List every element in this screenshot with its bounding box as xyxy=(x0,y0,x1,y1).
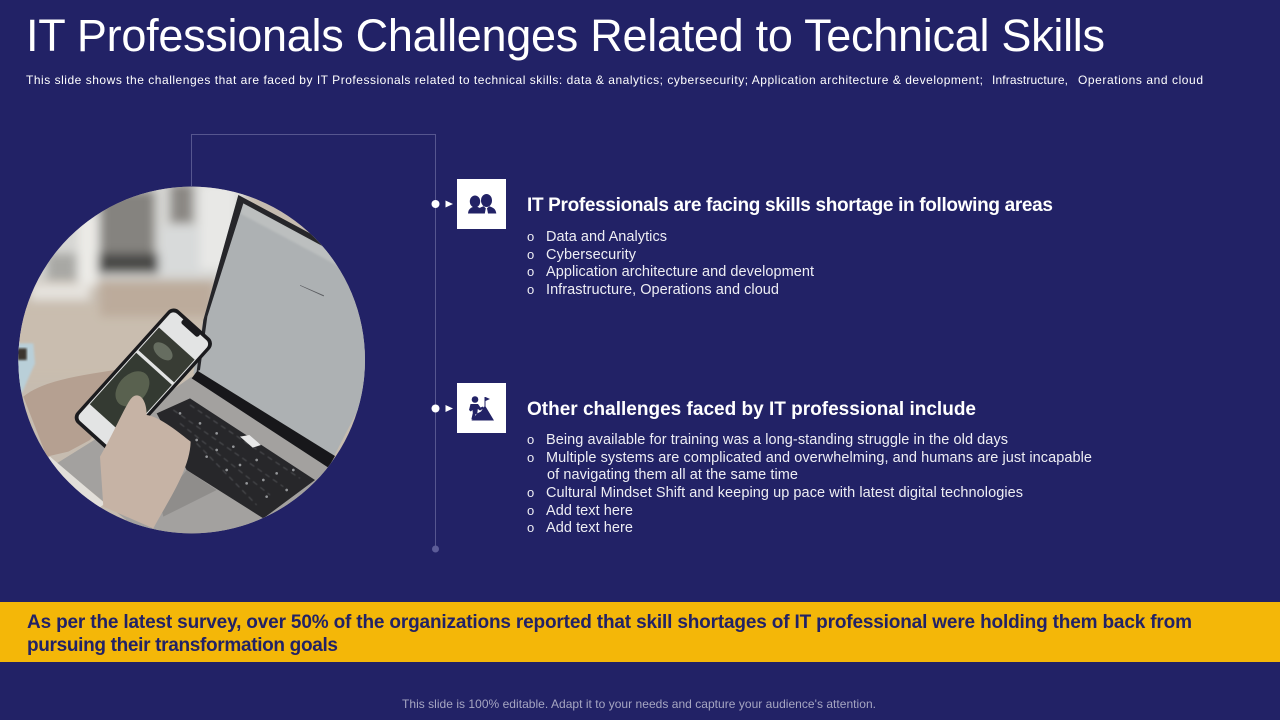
bullet list: Data and Analytics xyxy=(546,229,667,245)
callout banner: As per the latest survey, over 50% of the organizations reported that skill shortages of IT professional were holding them back from xyxy=(27,612,1192,633)
bullet list: o xyxy=(527,282,534,297)
icon: climber reaching flag on mountain xyxy=(457,383,506,433)
icon: two business people xyxy=(457,179,506,229)
bullet list: o xyxy=(527,432,534,447)
bullet list: o xyxy=(527,264,534,279)
bullet list: o xyxy=(527,520,534,535)
bullet list: Add text here xyxy=(546,503,633,519)
bullet list: Infrastructure, Operations and cloud xyxy=(546,282,779,298)
laptop base xyxy=(57,377,337,537)
left hand xyxy=(23,370,117,457)
photo: phone and laptop xyxy=(7,177,370,537)
title: IT Professionals Challenges Related to Technical Skills xyxy=(26,10,1105,61)
bullet list: o xyxy=(527,247,534,262)
bullet list: o xyxy=(527,450,534,465)
bullet list: o xyxy=(527,229,534,244)
callout banner xyxy=(0,602,1280,662)
bullet list: of navigating them all at the same time xyxy=(547,467,798,483)
bullet list: Cybersecurity xyxy=(546,247,637,263)
heading: IT Professionals are facing skills shortage in following areas xyxy=(527,195,1053,216)
bullet list xyxy=(527,229,814,298)
keyboard xyxy=(157,398,315,518)
callout banner: pursuing their transformation goals xyxy=(27,635,338,656)
timeline connector xyxy=(192,134,439,552)
phone xyxy=(74,308,212,448)
bullet list: Multiple systems are complicated and overwhelming, and humans are just incapable xyxy=(546,450,1092,466)
bullet list: Add text here xyxy=(546,520,633,536)
bullet list: Application architecture and development xyxy=(546,264,814,280)
laptop screen xyxy=(193,195,370,457)
right hand xyxy=(100,395,191,528)
subtitle: This slide shows the challenges that are faced by IT Professionals related to technical skills: data & analytics; cybersecurity; Application architecture & development; xyxy=(26,73,983,87)
section 1: skills shortage xyxy=(432,179,1053,298)
bullet list: o xyxy=(527,485,534,500)
subtitle: Operations and cloud xyxy=(1078,73,1203,87)
bullet list: Being available for training was a long-standing struggle in the old days xyxy=(546,432,1008,448)
cup xyxy=(18,342,36,394)
subtitle: Infrastructure, xyxy=(992,73,1068,87)
footer note: This slide is 100% editable. Adapt it to your needs and capture your audience's attention. xyxy=(402,697,876,711)
marker dot and arrow xyxy=(432,404,453,412)
marker dot and arrow xyxy=(432,200,453,208)
heading: Other challenges faced by IT professional include xyxy=(527,399,976,420)
bullet list xyxy=(527,432,1092,536)
bullet list: o xyxy=(527,503,534,518)
bullet list: Cultural Mindset Shift and keeping up pace with latest digital technologies xyxy=(546,485,1023,501)
section 2: other challenges xyxy=(432,383,1092,536)
